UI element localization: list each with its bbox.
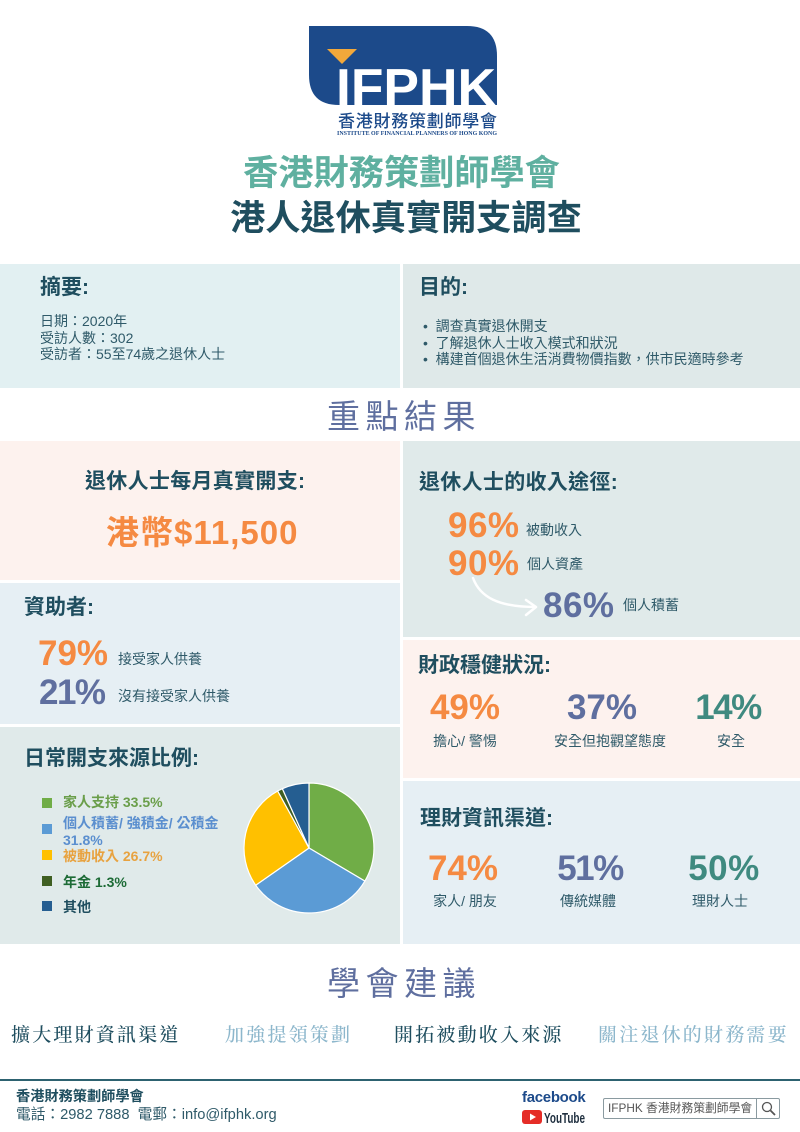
recommendation 2: 加強提領策劃 — [225, 1025, 352, 1046]
heading: key results: 重點結果 — [327, 398, 481, 435]
panel: purpose — [403, 264, 800, 388]
heading: purpose: 目的: — [419, 276, 468, 299]
stat: 74%: 74% — [428, 849, 498, 888]
panel: sponsors — [0, 583, 400, 724]
legend item: pension — [42, 876, 52, 886]
legend: 被動收入 26.7% — [63, 848, 163, 864]
panel: monthly spending — [0, 441, 400, 580]
recommendation 3: 開拓被動收入來源 — [394, 1025, 564, 1046]
label: 86%: 個人積蓄 — [623, 597, 679, 613]
search icon — [756, 1099, 780, 1118]
logo: IFPHK — [336, 59, 496, 117]
footer rule — [0, 1079, 800, 1081]
logo — [309, 26, 497, 137]
heading: information channels: 理財資訊渠道: — [420, 807, 553, 830]
panel: information channels — [403, 781, 800, 944]
legend: 31.8% — [63, 832, 103, 848]
arrow — [472, 576, 538, 616]
summary details: 受訪者：55至74歲之退休人士 — [40, 346, 225, 362]
heading: summary: 摘要: — [40, 276, 89, 299]
purpose bullets: • 構建首個退休生活消費物價指數，供市民適時參考 — [423, 351, 744, 367]
panel: daily expenses — [0, 727, 400, 944]
legend: 家人支持 33.5% — [63, 794, 163, 810]
purpose bullets: • 了解退休人士收入模式和狀況 — [423, 334, 618, 350]
legend — [42, 794, 219, 915]
heading: sponsors: 資助者: — [24, 596, 94, 619]
label: 90%: 個人資產 — [527, 556, 583, 572]
stat: 90%: 90% — [448, 544, 520, 583]
heading: monthly spending: 退休人士每月真實開支: — [85, 470, 305, 493]
stat: 49%: 49% — [430, 688, 500, 727]
recommendation 4: 關注退休的財務需要 — [598, 1025, 789, 1046]
label: 79%: 接受家人供養 — [118, 651, 202, 667]
legend item: savings — [42, 824, 52, 834]
pie chart — [244, 782, 374, 914]
panel: income sources — [403, 441, 800, 637]
stat: 37%: 37% — [567, 688, 637, 727]
panel: financial health — [403, 640, 800, 778]
legend: 個人積蓄/ 強積金/ 公積金 — [63, 815, 219, 831]
heading: financial health: 財政穩健狀況: — [418, 654, 551, 677]
summary details: 受訪人數：302 — [40, 330, 133, 346]
label: 49%: 擔心/ 警惕 — [433, 733, 497, 749]
title: 香港財務策劃師學會 — [243, 154, 560, 193]
summary details: 日期：2020年 — [40, 313, 127, 329]
recommendation 1: 擴大理財資訊渠道 — [11, 1025, 181, 1046]
stat: 51%: 51% — [557, 849, 623, 888]
figure: monthly spending: 港幣$11,500 — [106, 514, 298, 551]
logo: 香港財務策劃師學會 — [338, 111, 497, 131]
stat: 79%: 79% — [38, 634, 108, 673]
stat: 86%: 86% — [543, 586, 615, 625]
heading: income sources: 退休人士的收入途徑: — [419, 471, 618, 494]
label: 51%: 傳統媒體 — [560, 893, 616, 909]
panel: summary — [0, 264, 400, 388]
label: 14%: 安全 — [717, 733, 745, 749]
heading: recommendations: 學會建議 — [327, 965, 481, 1002]
label: 37%: 安全但抱觀望態度 — [554, 733, 666, 749]
youtube label — [522, 1110, 585, 1126]
legend: 年金 1.3% — [63, 874, 127, 890]
summary details — [40, 313, 225, 362]
footer name: 香港財務策劃師學會 — [16, 1089, 144, 1105]
legend item: passive income — [42, 850, 52, 860]
label: 74%: 家人/ 朋友 — [433, 893, 497, 909]
purpose bullets: • 調查真實退休開支 — [423, 318, 548, 334]
search text: IFPHK 香港財務策劃師學會 — [608, 1101, 752, 1115]
label: 50%: 理財人士 — [692, 893, 748, 909]
subtitle: 港人退休真實開支調查 — [230, 199, 582, 238]
facebook label: facebook — [522, 1089, 585, 1106]
purpose bullets — [423, 318, 744, 367]
stat: 96%: 96% — [448, 506, 520, 545]
heading: daily expenses: 日常開支來源比例: — [24, 747, 199, 770]
stat: 21%: 21% — [39, 673, 105, 712]
label: 21%: 沒有接受家人供養 — [118, 688, 230, 704]
label: 96%: 被動收入 — [526, 522, 582, 538]
stat: 14%: 14% — [695, 688, 761, 727]
footer contact — [16, 1088, 277, 1123]
stat: 50%: 50% — [688, 849, 760, 888]
footer phone and email: 電話：2982 7888 電郵：info@ifphk.org — [16, 1107, 277, 1123]
legend: 其他 — [63, 899, 91, 915]
legend item: other — [42, 901, 52, 911]
legend item: family — [42, 798, 52, 808]
search box — [603, 1098, 780, 1119]
